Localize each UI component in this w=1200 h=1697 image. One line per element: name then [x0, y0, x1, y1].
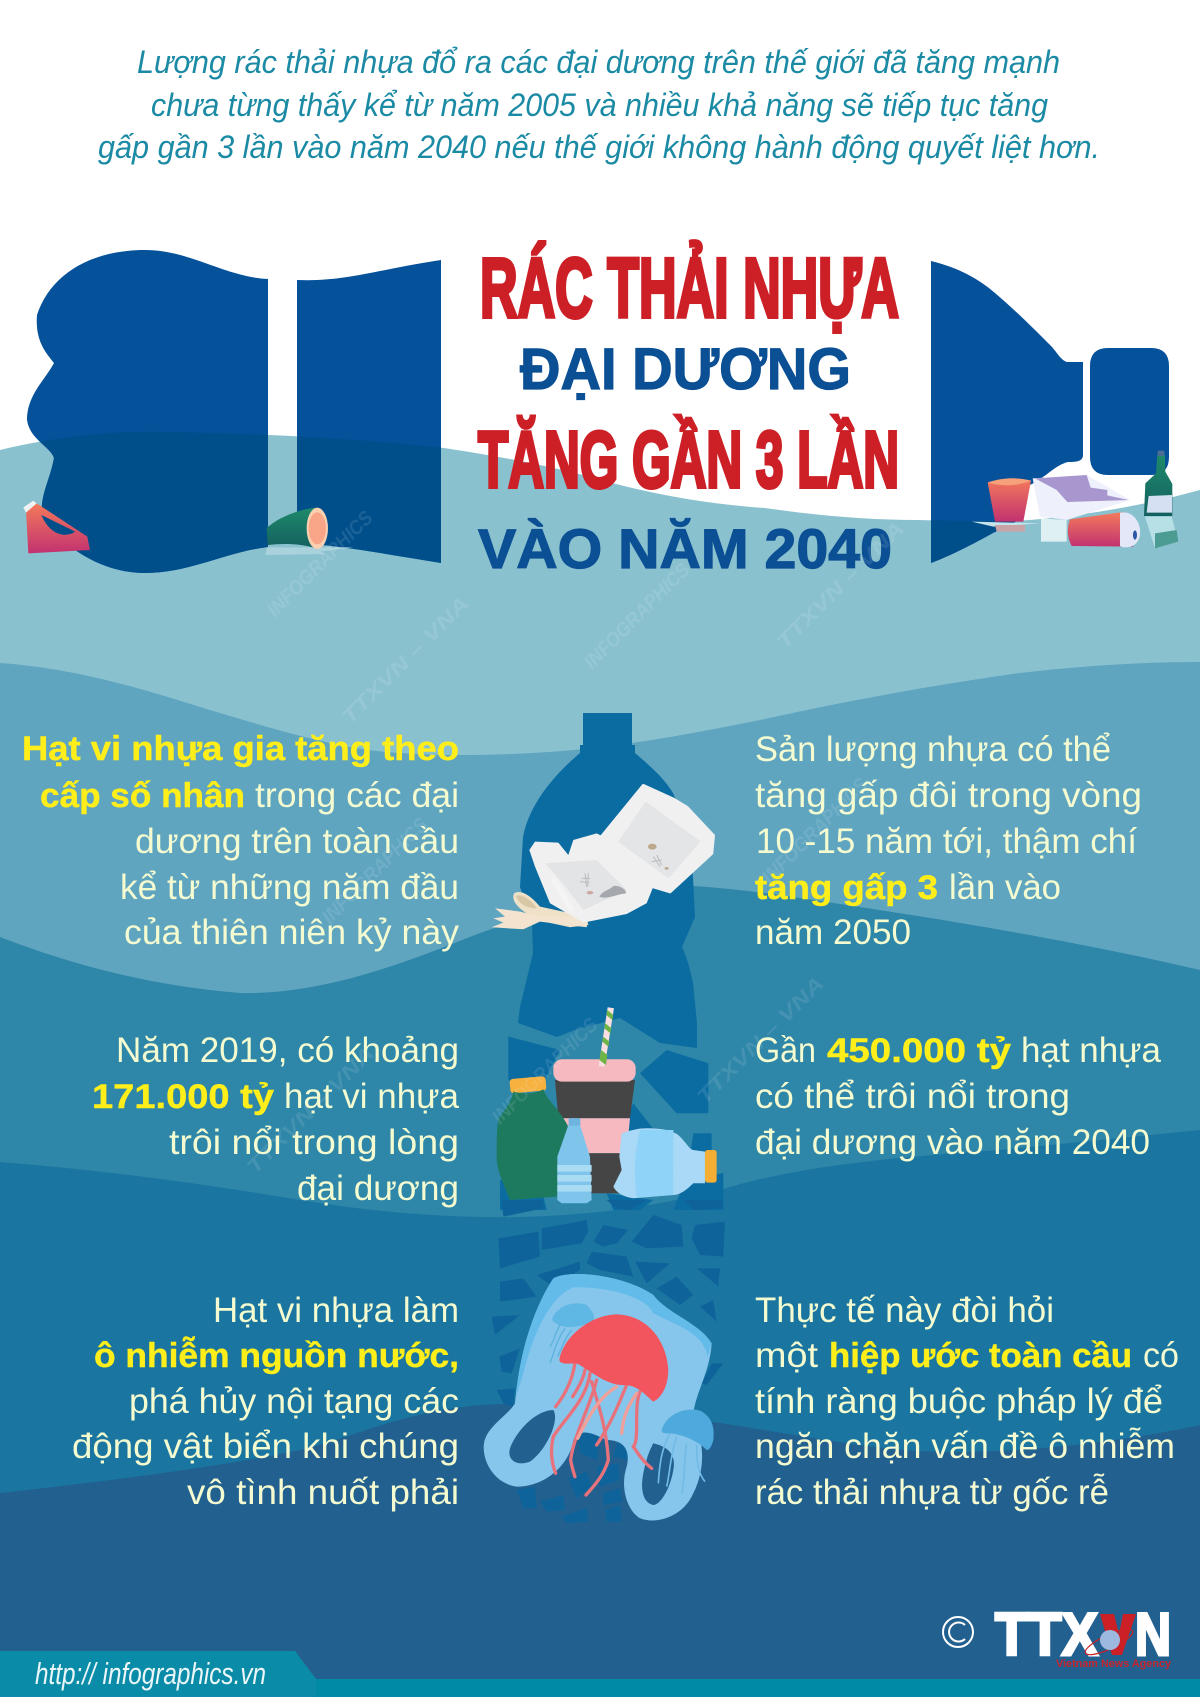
title: ĐẠI DƯƠNG: [520, 337, 851, 402]
text block: left 2: 171.000 tỷ: [92, 1078, 274, 1116]
text block: left 1: [22, 730, 460, 952]
text block: right 3: một: [755, 1336, 818, 1375]
icon: plastic bag with jellyfish: [484, 1274, 714, 1521]
text block: right 1: [755, 730, 1142, 952]
footer band with url tab: [0, 1651, 1200, 1697]
watermarks: INFOGRAPHICS: [580, 559, 695, 674]
text block: left 2: đại dương: [297, 1169, 459, 1208]
watermarks: INFOGRAPHICS: [758, 774, 873, 889]
text block: left 1: trong các đại: [255, 776, 459, 815]
text block: right 1: lần vào: [949, 868, 1061, 907]
intro text: gấp gần 3 lần vào năm 2040 nếu thế giới không hành động quyết liệt hơn.: [98, 129, 1100, 165]
text block: right 2: hạt nhựa: [1021, 1031, 1162, 1070]
watermarks: TTXVN – VNA: [338, 593, 474, 729]
text block: right 1: Sản lượng nhựa có thể: [755, 730, 1111, 769]
sea: lighter mid layer: [0, 662, 1200, 1697]
sea: deep layer: [0, 1130, 1200, 1697]
text block: left 2: Năm 2019, có khoảng: [116, 1031, 459, 1070]
text block: left 1: cấp số nhân: [40, 777, 245, 815]
sea: deepest layer: [0, 1404, 1200, 1697]
footer band with url tab: http:// infographics.vn: [35, 1656, 266, 1691]
text block: right 2: có thể trôi nổi trong: [755, 1077, 1070, 1116]
logo: TTXVN: N: [1135, 1601, 1171, 1668]
text block: right 1: năm 2050: [755, 913, 911, 952]
text block: left 3: phá hủy nội tạng các: [129, 1382, 459, 1421]
text block: right 3: rác thải nhựa từ gốc rễ: [755, 1473, 1109, 1512]
text block: left 3: Hạt vi nhựa làm: [213, 1291, 459, 1330]
text block: right 1: tăng gấp 3: [755, 869, 938, 907]
title: [478, 241, 899, 580]
text block: right 2: đại dương vào năm 2040: [755, 1123, 1150, 1162]
title: TĂNG GẦN 3 LẦN: [478, 415, 899, 504]
text block: right 3: có: [1143, 1336, 1179, 1375]
intro text: chưa từng thấy kể từ năm 2005 và nhiều khả năng sẽ tiếp tục tăng: [151, 87, 1048, 123]
icon: foam food box with cutlery: [492, 786, 713, 929]
icon: debris pile (cup, box, can, bottle): [972, 451, 1178, 548]
text block: right 2: Gần: [755, 1031, 816, 1070]
text block: left 1: dương trên toàn cầu: [135, 822, 459, 861]
text block: right 3: hiệp ước toàn cầu: [829, 1337, 1132, 1375]
logo: TTXVN: TTX: [995, 1601, 1098, 1668]
text block: right 3: tính ràng buộc pháp lý để: [755, 1382, 1163, 1421]
icon: green floating cup: [266, 508, 353, 555]
text block: left 1: của thiên niên kỷ này: [124, 913, 460, 952]
icon: red plastic jug: [23, 501, 90, 553]
icon: cup and plastic bottles: [497, 1007, 717, 1203]
text block: right 3: ngăn chặn vấn đề ô nhiễm: [755, 1427, 1175, 1466]
title: VÀO NĂM 2040: [478, 517, 892, 580]
logo: TTXVN: [943, 1601, 1172, 1670]
text block: right 1: tăng gấp đôi trong vòng: [755, 776, 1142, 815]
big plastic bottle silhouette: [27, 250, 1169, 573]
watermarks: TTXVN – VNA: [773, 518, 909, 654]
watermarks: INFOGRAPHICS: [488, 1014, 603, 1129]
intro text: Lượng rác thải nhựa đổ ra các đại dương trên thế giới đã tăng mạnh: [137, 44, 1060, 80]
text block: left 1: kể từ những năm đầu: [120, 868, 459, 907]
sea: surface wave layer: [0, 432, 1200, 1697]
text block: left 2: [92, 1031, 460, 1208]
text block: right 3: Thực tế này đòi hỏi: [755, 1291, 1054, 1330]
watermarks: TTXVN – VNA: [693, 973, 829, 1109]
text block: left 2: hạt vi nhựa: [284, 1077, 460, 1116]
text block: left 3: ô nhiễm nguồn nước,: [94, 1337, 459, 1375]
text block: left 3: [72, 1291, 459, 1512]
watermarks: [243, 507, 909, 1179]
text block: left 3: động vật biển khi chúng: [72, 1427, 459, 1466]
text block: right 3: [755, 1291, 1179, 1512]
text block: left 3: vô tình nuốt phải: [187, 1473, 459, 1512]
intro text: [98, 44, 1100, 165]
watermarks: INFOGRAPHICS: [318, 814, 433, 929]
sea: middle layer: [0, 884, 1200, 1697]
submerged bottle with cracked lower part: [492, 713, 725, 1523]
logo: TTXVN: Vietnam News Agency: [1056, 1658, 1172, 1670]
text block: right 1: 10 -15 năm tới, thậm chí: [756, 822, 1137, 861]
title: RÁC THẢI NHỰA: [480, 241, 899, 335]
text block: right 2: 450.000 tỷ: [827, 1032, 1011, 1070]
watermarks: INFOGRAPHICS: [263, 507, 378, 622]
text block: left 2: trôi nổi trong lòng: [169, 1123, 459, 1162]
text block: left 1: Hạt vi nhựa gia tăng theo: [22, 730, 459, 768]
watermarks: TTXVN – VNA: [243, 1043, 379, 1179]
text block: right 2: [755, 1031, 1162, 1162]
